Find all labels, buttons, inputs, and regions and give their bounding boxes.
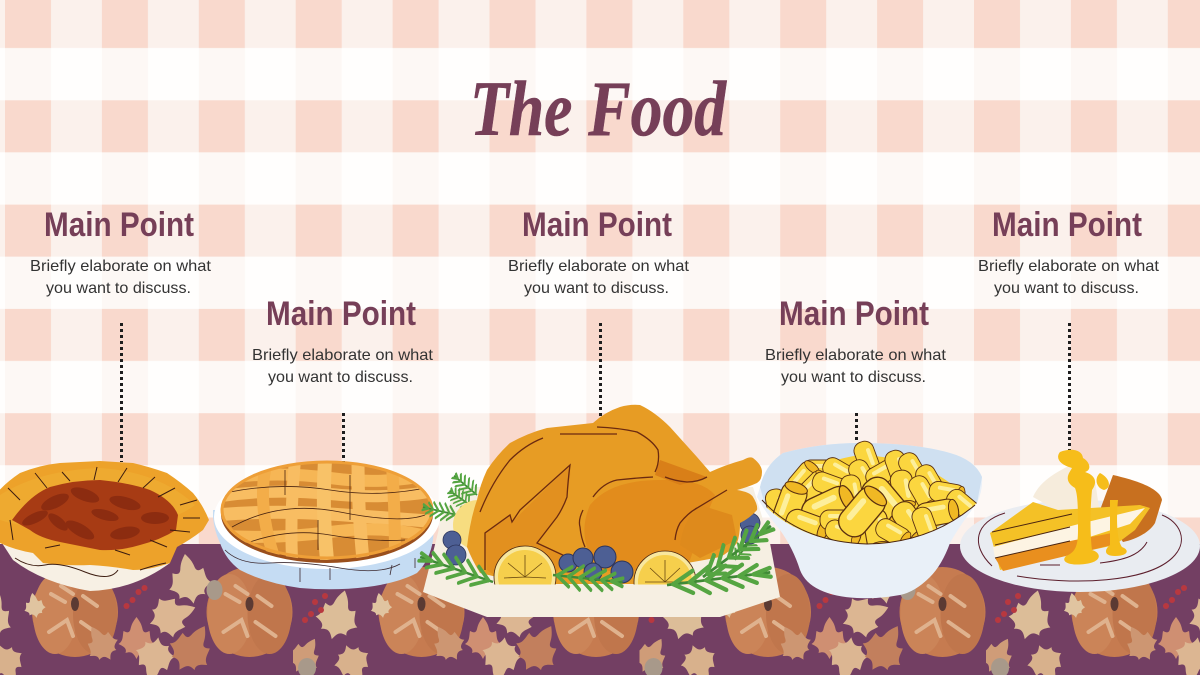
pie rim	[222, 462, 432, 558]
description: point 2: Briefly elaborate on what	[252, 347, 434, 364]
turkey outlines	[480, 427, 727, 570]
text block: point 4	[765, 295, 947, 386]
food: slice of pie on plate	[960, 450, 1200, 592]
dotted connector lines	[122, 323, 1070, 462]
bowl inner rim line	[762, 500, 975, 544]
crust	[0, 461, 209, 570]
herb sprigs, front	[416, 515, 779, 598]
herb sprigs, back	[421, 469, 764, 565]
heading: point 4: Main Point	[779, 295, 929, 333]
lattice strips	[215, 460, 440, 560]
food: lattice apple pie	[213, 460, 440, 589]
text block: point 5	[978, 206, 1160, 297]
description: point 1: Briefly elaborate on what	[30, 258, 212, 275]
food: macaroni bowl	[757, 439, 983, 598]
turkey wing	[485, 465, 570, 577]
description: point 4: Briefly elaborate on what	[765, 347, 947, 364]
bowl interior	[760, 443, 982, 544]
dish flutes	[225, 550, 415, 582]
patterned table band	[0, 544, 1200, 675]
plate ring	[978, 513, 1181, 581]
front blueberries	[559, 546, 633, 583]
crust crimp lines	[8, 467, 200, 555]
heading: point 1: Main Point	[44, 206, 194, 244]
description: point 2: you want to discuss.	[268, 369, 413, 386]
description: point 5: you want to discuss.	[994, 280, 1139, 297]
syrup drip	[1058, 450, 1099, 565]
plate wavy line	[15, 558, 166, 577]
description: point 3: Briefly elaborate on what	[508, 258, 690, 275]
text block: point 1	[30, 206, 212, 297]
turkey shading	[584, 480, 715, 571]
description: point 4: you want to discuss.	[781, 369, 926, 386]
heading: point 5: Main Point	[992, 206, 1142, 244]
pie base	[221, 462, 433, 558]
pecan filling	[12, 480, 178, 550]
title: The Food	[470, 65, 727, 152]
plate	[960, 500, 1200, 592]
whipped cream	[1033, 463, 1100, 515]
front lemons	[494, 546, 696, 584]
back lemon	[453, 500, 503, 550]
bowl	[757, 443, 982, 598]
pie shadow	[221, 465, 433, 563]
description: point 1: you want to discuss.	[46, 280, 191, 297]
turkey body	[467, 405, 762, 584]
white rim	[214, 465, 440, 569]
back blueberries	[443, 513, 760, 565]
heading: point 2: Main Point	[266, 295, 416, 333]
food: pecan pie	[0, 461, 209, 591]
platter	[423, 487, 780, 617]
text block: point 3	[508, 206, 690, 297]
text block: point 2	[252, 295, 434, 386]
pie plate	[0, 540, 170, 591]
food: roast turkey on platter	[416, 405, 780, 617]
pie dish	[213, 510, 436, 589]
back crust	[1100, 475, 1162, 542]
description: point 3: you want to discuss.	[524, 280, 669, 297]
slice layers	[990, 502, 1150, 570]
heading: point 3: Main Point	[522, 206, 672, 244]
description: point 5: Briefly elaborate on what	[978, 258, 1160, 275]
macaroni	[765, 440, 977, 544]
